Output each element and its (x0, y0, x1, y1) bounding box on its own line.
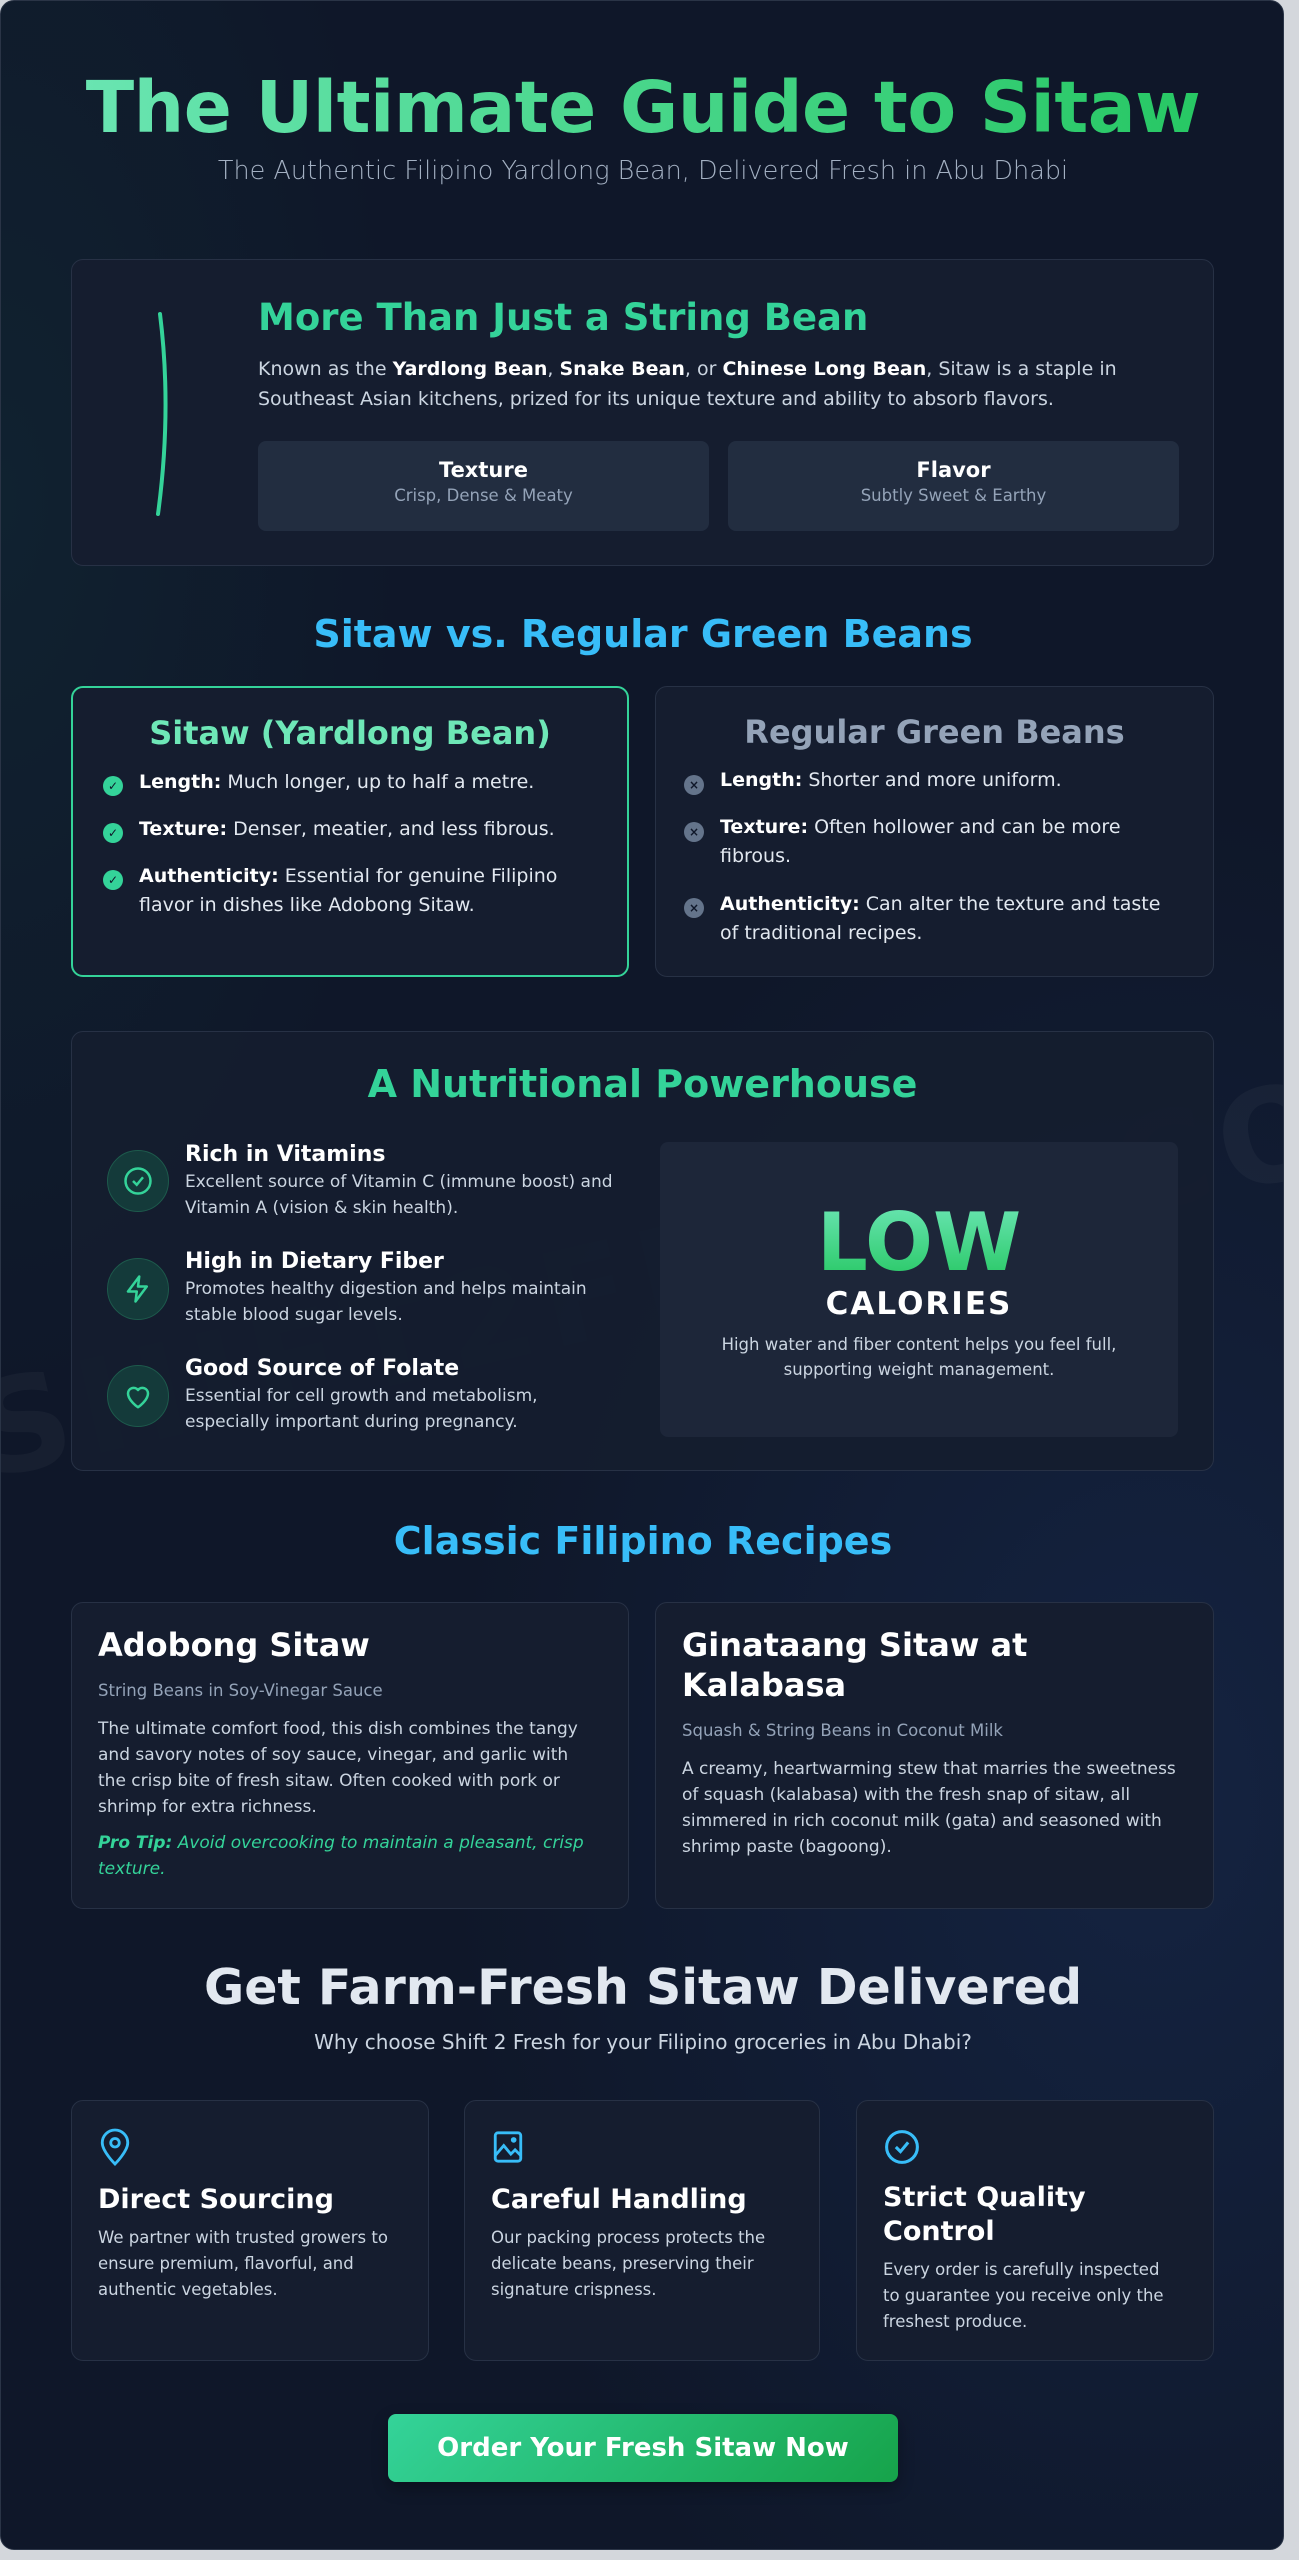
feature: quality: Strict Quality Control (883, 2182, 1086, 2247)
panel: sitaw: ✓ (108, 826, 118, 840)
nutrition item: vitamins (107, 1142, 613, 1218)
feature: sourcing (71, 2100, 429, 2361)
nutrition item: vitamins: Rich in Vitamins (185, 1142, 385, 1167)
panel: sitaw: Authenticity: Essential for genuine Filipino flavor in dishes like Adobong Sitaw. (139, 865, 557, 916)
recipe card: ginataang: Ginataang Sitaw at Kalabasa (682, 1626, 1027, 1704)
recipe card: ginataang: Squash & String Beans in Coconut Milk (682, 1721, 1003, 1740)
panel: sitaw: Texture: Denser, meatier, and less fibrous. (139, 818, 555, 840)
recipe card: adobong: String Beans in Soy-Vinegar Sauce (98, 1681, 383, 1700)
panel: green beans: × (689, 901, 699, 915)
nutrition item: fiber (107, 1249, 587, 1325)
nutrition item: folate: Good Source of Folate (185, 1356, 459, 1381)
recipe card: adobong (71, 1602, 629, 1909)
panel: green beans: Authenticity: Can alter the texture and taste of traditional recipes. (720, 893, 1160, 944)
panel: sitaw: ✓ (108, 779, 118, 793)
feature: quality: Every order is carefully inspected to guarantee you receive only the freshest produce. (883, 2260, 1164, 2331)
panel: sitaw: Length: Much longer, up to half a metre. (139, 771, 534, 793)
box: flavor: Flavor (916, 458, 991, 482)
panel: sitaw (71, 686, 629, 977)
low calories box (660, 1142, 1178, 1437)
recipe card: adobong: Adobong Sitaw (98, 1626, 370, 1664)
box: texture: Texture (439, 458, 528, 482)
panel: green beans: Texture: Often hollower and can be more fibrous. (720, 816, 1121, 867)
icon: bean line (156, 312, 168, 516)
feature: quality (856, 2100, 1214, 2361)
heading: recipes: Classic Filipino Recipes (394, 1519, 892, 1563)
feature: handling (464, 2100, 820, 2361)
box: texture (258, 441, 709, 531)
nutrition item: folate (107, 1356, 538, 1432)
nutrition item: folate: especially important during pregnancy. (185, 1412, 518, 1432)
panel: intro (71, 259, 1214, 566)
recipe card: ginataang (655, 1602, 1214, 1909)
button: order (388, 2414, 898, 2482)
recipe card: adobong: Pro Tip: Avoid overcooking to maintain a pleasant, crisp texture. (98, 1833, 584, 1879)
panel: sitaw: Sitaw (Yardlong Bean) (149, 714, 551, 752)
panel: nutrition (71, 1031, 1214, 1471)
nutrition item: vitamins: Excellent source of Vitamin C (immune boost) and (185, 1172, 613, 1192)
low calories box: LOW (817, 1196, 1021, 1289)
nutrition item: fiber: Promotes healthy digestion and helps maintain (185, 1279, 587, 1299)
intro text: Known as the Yardlong Bean, Snake Bean, or Chinese Long Bean, Sitaw is a staple in Southeast Asian kitchens, prized for its unique texture and ability to absorb flavors. (258, 358, 1117, 410)
feature: sourcing: Direct Sourcing (98, 2184, 334, 2215)
box: flavor (728, 441, 1179, 531)
panel: sitaw: ✓ (108, 873, 118, 887)
recipe card: adobong: The ultimate comfort food, this dish combines the tangy and savory notes of soy sauce, vinegar, and garlic with the crisp bite of fresh sitaw. Often cooked with pork or shrimp for extra richness. (98, 1719, 578, 1817)
intro heading: More Than Just a String Bean (258, 296, 868, 339)
feature: handling: Careful Handling (491, 2184, 747, 2215)
button: order: Order Your Fresh Sitaw Now (437, 2433, 849, 2463)
panel: green beans: Regular Green Beans (744, 713, 1125, 751)
box: flavor: Subtly Sweet & Earthy (861, 486, 1046, 505)
box: texture: Crisp, Dense & Meaty (394, 486, 573, 505)
panel: green beans: × (689, 825, 699, 839)
panel: green beans: Length: Shorter and more uniform. (720, 769, 1062, 791)
nutrition item: folate: Essential for cell growth and metabolism, (185, 1386, 538, 1406)
low calories box: CALORIES (826, 1286, 1012, 1322)
nutrition item: fiber: stable blood sugar levels. (185, 1305, 403, 1325)
heading: comparison: Sitaw vs. Regular Green Beans (313, 612, 973, 656)
nutrition item: fiber: High in Dietary Fiber (185, 1249, 444, 1274)
delivery subtitle: Why choose Shift 2 Fresh for your Filipino groceries in Abu Dhabi? (314, 2030, 972, 2054)
subtitle: The Authentic Filipino Yardlong Bean, Delivered Fresh in Abu Dhabi (218, 156, 1068, 186)
heading: delivery: Get Farm-Fresh Sitaw Delivered (204, 1959, 1082, 2016)
panel: green beans: × (689, 778, 699, 792)
low calories box: High water and fiber content helps you feel full, (722, 1335, 1116, 1354)
title: The Ultimate Guide to Sitaw (86, 66, 1200, 149)
recipe card: ginataang: A creamy, heartwarming stew that marries the sweetness of squash (kalabasa) with the fresh snap of sitaw, all simmered in rich coconut milk (gata) and seasoned with shrimp paste (bagoong). (682, 1759, 1176, 1857)
feature: handling: Our packing process protects the delicate beans, preserving their signature crispness. (491, 2228, 765, 2299)
low calories box: supporting weight management. (784, 1360, 1054, 1379)
panel: green beans (655, 686, 1214, 977)
panel: nutrition: A Nutritional Powerhouse (368, 1062, 917, 1106)
feature: sourcing: We partner with trusted growers to ensure premium, flavorful, and authentic vegetables. (98, 2228, 388, 2299)
nutrition item: vitamins: Vitamin A (vision & skin health). (185, 1198, 458, 1218)
